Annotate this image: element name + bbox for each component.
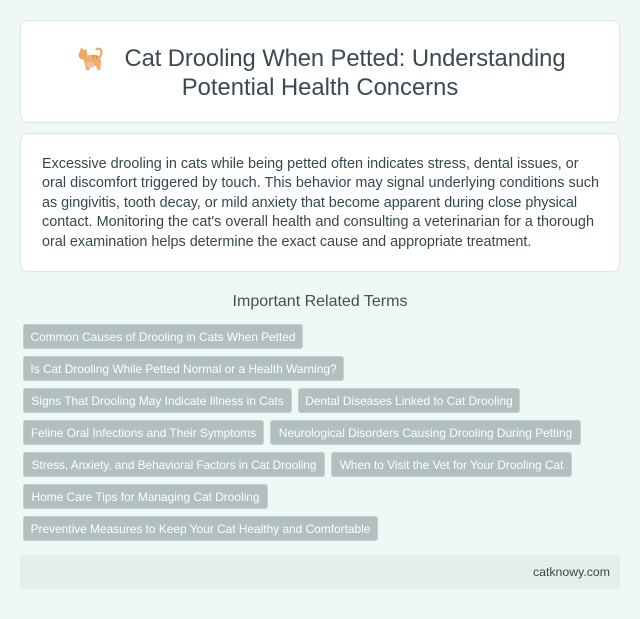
icon: cat [78, 48, 102, 70]
chip: Common Causes of Drooling in Cats When Petted [30, 330, 296, 344]
heading: related terms: Important Related Terms [233, 293, 407, 310]
footer bar [20, 555, 620, 589]
chip [298, 388, 520, 413]
description text: as gingivitis, tooth decay, or mild anxiety that become apparent during close physical [42, 195, 577, 211]
chip: Is Cat Drooling While Petted Normal or a Health Warning? [30, 362, 337, 376]
chip [270, 420, 581, 445]
title [125, 45, 565, 101]
title: Potential Health Concerns [182, 74, 458, 101]
chip [23, 516, 378, 541]
chip: When to Visit the Vet for Your Drooling Cat [340, 458, 563, 472]
panel: title card [20, 20, 620, 123]
chip [23, 388, 292, 413]
chip [23, 420, 264, 445]
panel: description [20, 133, 620, 272]
chip [331, 452, 572, 477]
chip [23, 484, 268, 509]
description text: Excessive drooling in cats while being petted often indicates stress, dental issues, or [42, 156, 578, 172]
chip: Dental Diseases Linked to Cat Drooling [305, 394, 513, 408]
description text [42, 156, 599, 250]
chip: Stress, Anxiety, and Behavioral Factors in Cat Drooling [32, 458, 316, 472]
chip: Signs That Drooling May Indicate Illness in Cats [31, 394, 284, 408]
description text: oral examination helps determine the exact cause and appropriate treatment. [42, 234, 531, 250]
chip [23, 356, 344, 381]
chip [23, 324, 303, 349]
chip: Home Care Tips for Managing Cat Drooling [31, 490, 260, 504]
footer source: catknowy.com [533, 565, 610, 579]
description text: contact. Monitoring the cat's overall health and consulting a veterinarian for a thorough [42, 214, 594, 230]
related term chips [23, 324, 581, 541]
chip: Preventive Measures to Keep Your Cat Healthy and Comfortable [31, 522, 370, 536]
chip [23, 452, 325, 477]
chip: Feline Oral Infections and Their Symptoms [31, 426, 256, 440]
title: Cat Drooling When Petted: Understanding [125, 45, 565, 72]
chip: Neurological Disorders Causing Drooling During Petting [279, 426, 572, 440]
description text: oral discomfort triggered by touch. This behavior may signal underlying conditions such [42, 175, 599, 191]
